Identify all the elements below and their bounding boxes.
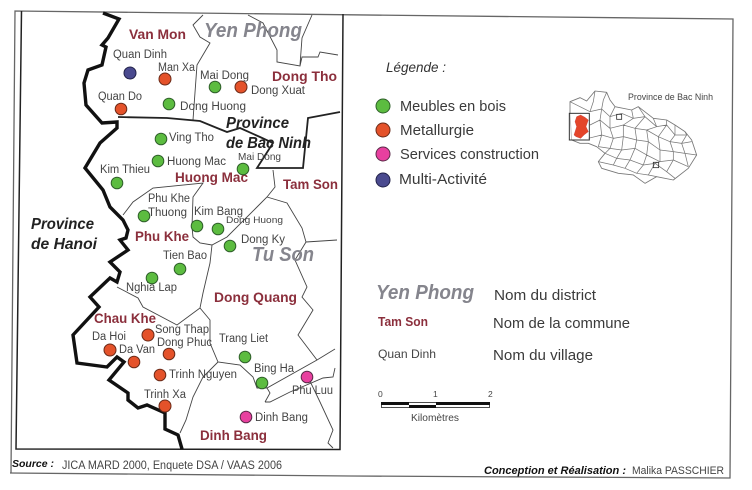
source note bbox=[12, 458, 282, 472]
source note: Source : bbox=[12, 458, 54, 470]
panel: map bbox=[16, 11, 343, 450]
legend: names bbox=[376, 282, 630, 364]
commune name key bbox=[378, 315, 630, 332]
source note: JICA MARD 2000, Enquete DSA / VAAS 2006 bbox=[62, 460, 282, 472]
legend item: Metallurgie: Metallurgie bbox=[400, 122, 474, 139]
credit bbox=[484, 465, 724, 477]
village markers bbox=[104, 67, 313, 423]
village names: Mai Dong bbox=[200, 70, 249, 82]
village name key: Nom du village bbox=[493, 347, 593, 364]
district and province names: de Hanoi bbox=[31, 236, 98, 253]
village names: Trinh Xa bbox=[144, 389, 187, 401]
village name key bbox=[378, 347, 593, 364]
village names: Quan Dinh bbox=[113, 49, 167, 61]
legend item: Multi-Activité: Multi-Activité bbox=[399, 171, 487, 188]
commune names: Van Mon bbox=[129, 26, 186, 42]
village names: Song Thap bbox=[155, 324, 209, 336]
village names: Bing Ha bbox=[254, 363, 295, 375]
legend heading: Légende : bbox=[386, 60, 446, 75]
village names: Dong Huong bbox=[226, 215, 283, 226]
village names: Dong Huong bbox=[180, 101, 246, 113]
village names: Da Van bbox=[119, 344, 155, 356]
village names: Thuong bbox=[148, 207, 187, 219]
district and province names: Province bbox=[226, 115, 289, 132]
village names: Dong Ky bbox=[241, 234, 285, 246]
inset map: Province de Bac Ninh bbox=[569, 91, 713, 183]
village names: Kim Bang bbox=[194, 206, 243, 218]
commune names: Chau Khe bbox=[94, 310, 156, 326]
district and province names: Yen Phong bbox=[204, 20, 302, 42]
village names: Phu Khe bbox=[148, 193, 190, 205]
commune names: Tam Son bbox=[283, 176, 338, 192]
district name key bbox=[376, 282, 597, 304]
province boundary: Bac Ninh internal bbox=[118, 112, 340, 168]
commune names: Phu Khe bbox=[135, 228, 189, 244]
legend item: Services construction: Services construction bbox=[400, 146, 539, 163]
commune name key: Nom de la commune bbox=[493, 315, 630, 332]
district name key: Nom du district bbox=[494, 287, 597, 304]
village names: Tien Bao bbox=[163, 250, 207, 262]
village names: Mai Dong bbox=[238, 151, 281, 163]
district name key: Yen Phong bbox=[376, 282, 474, 304]
village names: Huong Mac bbox=[167, 156, 226, 168]
district and province names bbox=[31, 20, 314, 266]
district and province names: Province bbox=[31, 216, 94, 233]
scale bar: Kilomètres bbox=[411, 413, 459, 424]
village names: Nghia Lap bbox=[126, 282, 177, 294]
province boundary: Hanoi bbox=[73, 13, 182, 449]
village name key: Quan Dinh bbox=[378, 347, 436, 361]
commune names: Dong Quang bbox=[214, 289, 297, 305]
legend item: Meubles en bois: Meubles en bois bbox=[400, 98, 506, 115]
village names: Dinh Bang bbox=[255, 412, 308, 424]
district and province names: Tu Son bbox=[252, 244, 314, 266]
village names: Ving Tho bbox=[169, 132, 214, 144]
village names: Quan Do bbox=[98, 91, 142, 103]
inset map: Province de Bac Ninh: Province de Bac Ninh bbox=[628, 92, 713, 102]
credit: Malika PASSCHIER bbox=[632, 465, 724, 477]
scale bar: 1 bbox=[433, 389, 438, 399]
district and province names: de Bac Ninh bbox=[226, 135, 311, 152]
legend: activities bbox=[376, 98, 539, 188]
commune names: Dinh Bang bbox=[200, 427, 267, 443]
scale bar: 0 bbox=[378, 389, 383, 399]
village names: Man Xa bbox=[158, 62, 196, 74]
village names: Dong Phuc bbox=[157, 337, 212, 349]
commune boundaries bbox=[117, 15, 338, 448]
village names bbox=[92, 49, 333, 424]
village names: Kim Thieu bbox=[100, 164, 150, 176]
credit: Conception et Réalisation : bbox=[484, 465, 626, 477]
village names: Dong Xuat bbox=[251, 85, 306, 97]
village names: Da Hoi bbox=[92, 331, 126, 343]
scale bar: 2 bbox=[488, 389, 493, 399]
commune names bbox=[94, 26, 338, 443]
scale bar bbox=[378, 389, 493, 424]
village names: Trang Liet bbox=[219, 333, 269, 345]
commune names: Dong Tho bbox=[272, 68, 337, 84]
commune name key: Tam Son bbox=[378, 315, 428, 329]
commune names: Huong Mac bbox=[175, 169, 248, 185]
village names: Phu Luu bbox=[292, 385, 333, 397]
village names: Trinh Nguyen bbox=[169, 369, 237, 381]
